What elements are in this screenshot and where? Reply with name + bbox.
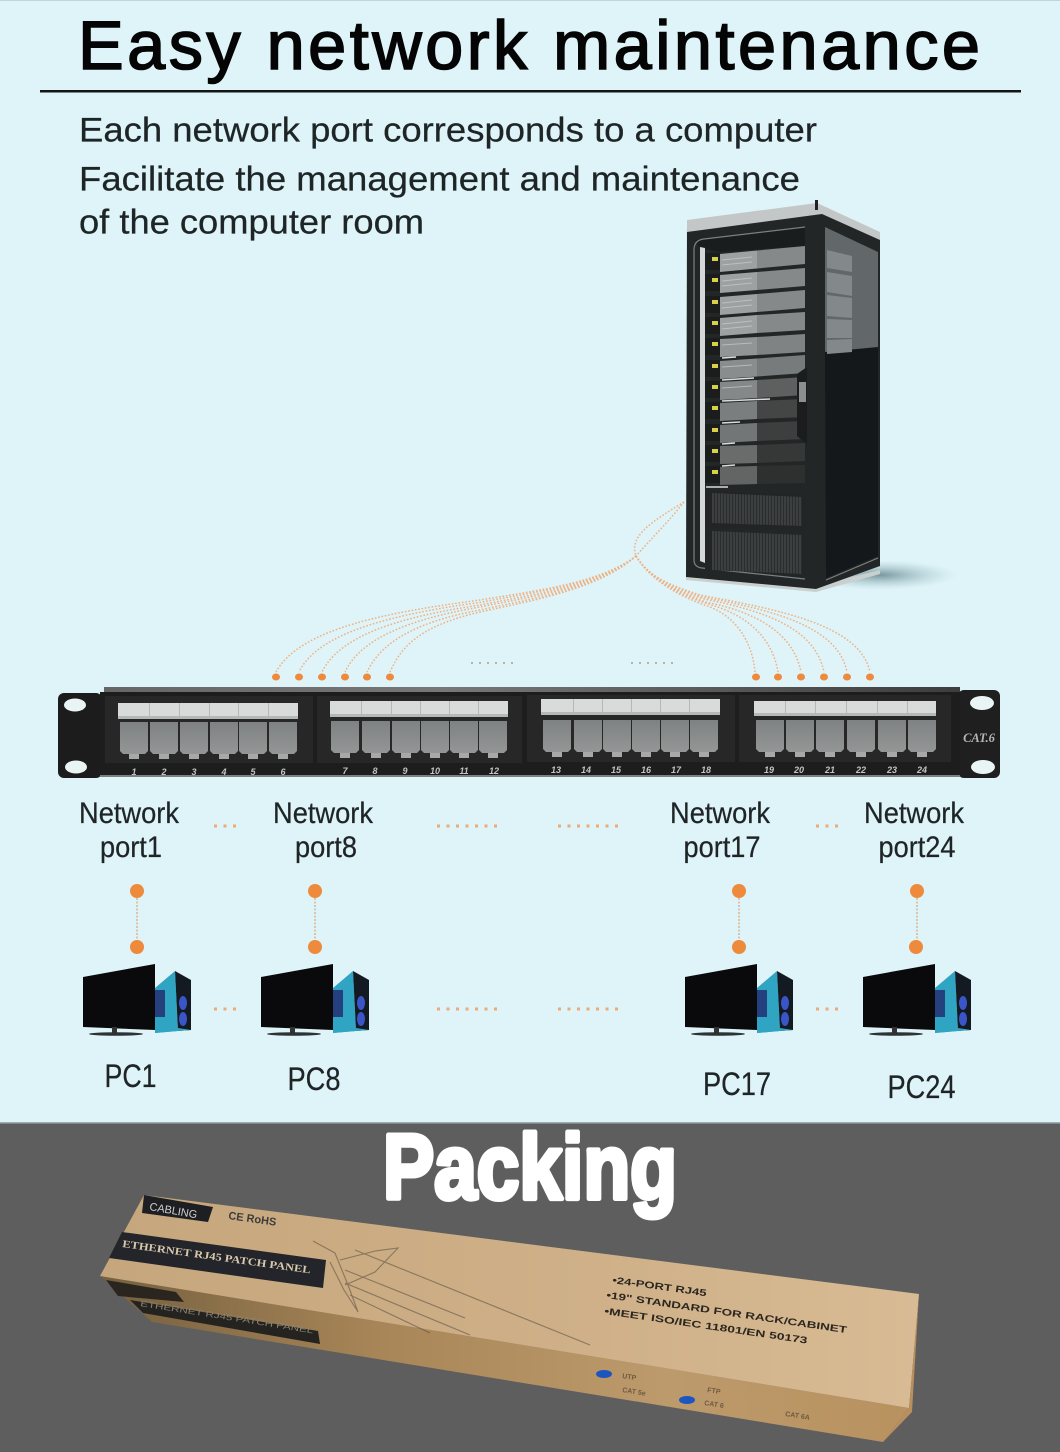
icon: PC17 — [685, 964, 793, 1036]
brand label: CABLING — [148, 1201, 198, 1221]
port numbers: 9 — [402, 766, 408, 776]
port numbers: 13 — [551, 765, 561, 775]
storage units — [705, 491, 805, 574]
port numbers: 23 — [886, 765, 897, 775]
port numbers: 14 — [581, 765, 591, 775]
background — [0, 0, 1060, 1122]
ellipsis between port labels — [214, 824, 840, 828]
port numbers: 15 — [611, 765, 622, 775]
intro text: Each network port corresponds to a computer — [79, 112, 817, 150]
cable type labels: UTP — [622, 1373, 637, 1382]
server status lights — [705, 253, 720, 483]
icon: PC24 — [863, 964, 971, 1036]
lower face labels — [106, 1280, 320, 1344]
door outline — [694, 227, 878, 580]
selection dots — [596, 1370, 695, 1404]
intro text: of the computer room — [79, 204, 424, 242]
panel: packing — [0, 1116, 1060, 1452]
port numbers: 17 — [671, 765, 682, 775]
cable type labels: FTP — [707, 1387, 721, 1396]
title: Easy network maintenance — [78, 7, 980, 84]
cable type labels: CAT 6 — [704, 1400, 724, 1410]
port numbers: 24 — [916, 765, 927, 775]
intro text: Facilitate the management and maintenance — [79, 160, 800, 198]
port numbers: 16 — [641, 765, 652, 775]
feature bullets: •19" STANDARD FOR RACK/CABINET — [606, 1290, 848, 1336]
port numbers: 4 — [220, 767, 227, 777]
packing heading: Packing — [383, 1116, 677, 1218]
label strips — [118, 699, 936, 719]
port numbers: 10 — [430, 766, 440, 776]
port labels: port17 — [684, 831, 760, 864]
port labels — [79, 797, 965, 864]
cable type labels — [622, 1373, 810, 1422]
port numbers: 6 — [280, 767, 286, 777]
port labels: Network — [864, 797, 965, 830]
icon: PC8 — [261, 964, 369, 1036]
port numbers: 8 — [372, 766, 378, 776]
port labels: port8 — [295, 831, 357, 864]
PC labels: PC8 — [288, 1061, 340, 1097]
ports — [120, 720, 936, 759]
server rack — [686, 200, 958, 592]
port labels: port24 — [878, 831, 956, 864]
connector dots — [130, 884, 924, 954]
feature bullets: •24-PORT RJ45 — [612, 1275, 708, 1299]
port numbers: 22 — [855, 765, 866, 775]
group frames — [105, 695, 951, 763]
port numbers: 19 — [764, 765, 774, 775]
intro text — [79, 112, 817, 242]
certification marks: CE RoHS — [228, 1210, 277, 1229]
cable type labels: CAT 6A — [785, 1411, 810, 1422]
server units — [706, 246, 805, 487]
category mark: CAT.6 — [963, 731, 996, 745]
ellipsis above panel — [471, 662, 677, 664]
patch panel — [58, 687, 1000, 778]
brand label — [142, 1195, 213, 1222]
port labels: port1 — [100, 831, 162, 864]
title rule — [40, 90, 1021, 92]
port numbers: 12 — [489, 766, 499, 776]
rack door handle — [797, 367, 807, 444]
port numbers — [131, 765, 927, 777]
cable type labels: CAT 5e — [622, 1387, 646, 1398]
port labels: Network — [670, 797, 771, 830]
feature bullets — [604, 1275, 848, 1347]
PC labels: PC1 — [104, 1058, 156, 1094]
port numbers: 5 — [250, 767, 256, 777]
PC labels: PC24 — [888, 1069, 956, 1105]
port numbers: 7 — [342, 766, 348, 776]
icon: PC1 — [83, 964, 191, 1036]
port numbers: 1 — [131, 767, 137, 777]
port numbers: 20 — [793, 765, 804, 775]
hummingbird drawing — [313, 1241, 590, 1345]
product band — [109, 1232, 326, 1288]
cardboard box — [100, 1195, 919, 1442]
connector lines — [137, 891, 917, 947]
cable end dots — [272, 674, 874, 680]
port numbers: 21 — [824, 765, 835, 775]
port numbers: 18 — [701, 765, 711, 775]
ellipsis between PCs — [214, 1008, 840, 1010]
mounting holes — [64, 696, 995, 774]
PC labels — [104, 1058, 956, 1105]
PC labels: PC17 — [703, 1066, 771, 1102]
lower face labels: ETHERNET RJ45 PATCH PANEL — [140, 1299, 315, 1335]
port labels: Network — [273, 797, 374, 830]
feature bullets: •MEET ISO/IEC 11801/EN 50173 — [604, 1306, 808, 1347]
port numbers: 3 — [191, 767, 197, 777]
fibre fan-out cables — [276, 502, 870, 672]
product band: ETHERNET RJ45 PATCH PANEL — [122, 1239, 311, 1276]
port numbers: 11 — [459, 766, 469, 776]
port labels: Network — [79, 797, 180, 830]
port numbers: 2 — [160, 767, 167, 777]
